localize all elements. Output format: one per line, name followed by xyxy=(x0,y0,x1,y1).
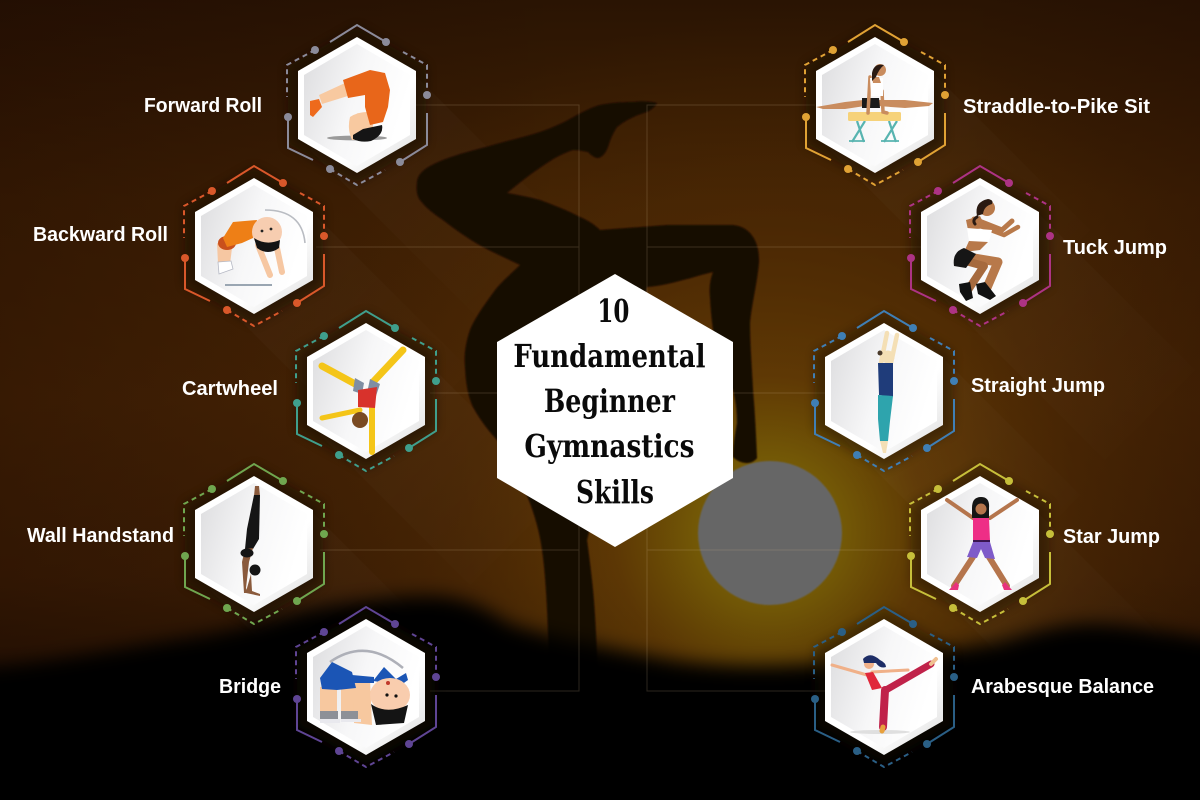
hexagon: Bridge xyxy=(307,619,425,755)
title: Fundamental xyxy=(513,337,705,375)
frame: Cartwheel xyxy=(293,311,440,471)
hexagon: Straddle-to-Pike Sit xyxy=(816,37,934,173)
title: Beginner xyxy=(544,382,676,420)
icon: tuck jump figure xyxy=(954,199,1018,301)
skill: Arabesque Balance xyxy=(811,607,1154,767)
hexagon: Forward Roll xyxy=(298,37,416,173)
skill: Wall Handstand xyxy=(27,464,328,624)
skill: Bridge xyxy=(219,607,440,767)
label: Forward Roll: Forward Roll xyxy=(144,95,262,117)
icon: wall handstand figure xyxy=(240,486,260,596)
skill: Forward Roll xyxy=(144,25,431,185)
label: Wall Handstand: Wall Handstand xyxy=(27,525,174,547)
frame: Arabesque Balance xyxy=(811,607,958,767)
sun xyxy=(698,461,842,605)
hexagon: Wall Handstand xyxy=(195,476,313,612)
hexagon: Backward Roll xyxy=(195,178,313,314)
icon: star jump figure xyxy=(947,497,1017,590)
frame: Straddle-to-Pike Sit xyxy=(802,25,949,185)
hexagon: Straight Jump xyxy=(825,323,943,459)
icon: forward roll figure xyxy=(310,70,390,142)
central title hexagon xyxy=(497,274,733,547)
title: Skills xyxy=(576,473,654,511)
label: Cartwheel: Cartwheel xyxy=(182,378,278,400)
frame: Star Jump xyxy=(907,464,1054,624)
hexagon: Tuck Jump xyxy=(921,178,1039,314)
hexagon: Arabesque Balance xyxy=(825,619,943,755)
label: Star Jump: Star Jump xyxy=(1063,526,1160,548)
skill: Straddle-to-Pike Sit xyxy=(802,25,1150,185)
frame: Forward Roll xyxy=(284,25,431,185)
frame: Straight Jump xyxy=(811,311,958,471)
hills silhouette xyxy=(0,596,1200,800)
icon: arabesque figure xyxy=(832,655,936,734)
label: Straddle-to-Pike Sit: Straddle-to-Pike Sit xyxy=(963,96,1150,118)
icon: straddle on pommel figure xyxy=(816,64,933,142)
frame: Wall Handstand xyxy=(181,464,328,624)
hexagon: Star Jump xyxy=(921,476,1039,612)
title: Gymnastics xyxy=(524,427,694,465)
icon: bridge figure xyxy=(320,651,410,725)
gymnast silhouette xyxy=(417,101,759,720)
label: Arabesque Balance: Arabesque Balance xyxy=(971,676,1154,698)
skill: Straight Jump xyxy=(811,311,1105,471)
title: 10 xyxy=(597,292,629,330)
label: Bridge: Bridge xyxy=(219,676,281,698)
frame: Backward Roll xyxy=(181,166,328,326)
skill: Tuck Jump xyxy=(907,166,1167,326)
hexagon: Cartwheel xyxy=(307,323,425,459)
frame: Bridge xyxy=(293,607,440,767)
label: Backward Roll: Backward Roll xyxy=(33,224,168,246)
icon: straight jump figure xyxy=(878,333,897,453)
skill: Backward Roll xyxy=(33,166,328,326)
connector lines xyxy=(316,105,925,691)
icon: backward roll figure xyxy=(217,210,305,285)
frame: Tuck Jump xyxy=(907,166,1054,326)
icon: cartwheel figure xyxy=(322,350,403,452)
skill: Cartwheel xyxy=(182,311,440,471)
skill: Star Jump xyxy=(907,464,1160,624)
label: Straight Jump: Straight Jump xyxy=(971,375,1105,397)
label: Tuck Jump: Tuck Jump xyxy=(1063,237,1167,259)
